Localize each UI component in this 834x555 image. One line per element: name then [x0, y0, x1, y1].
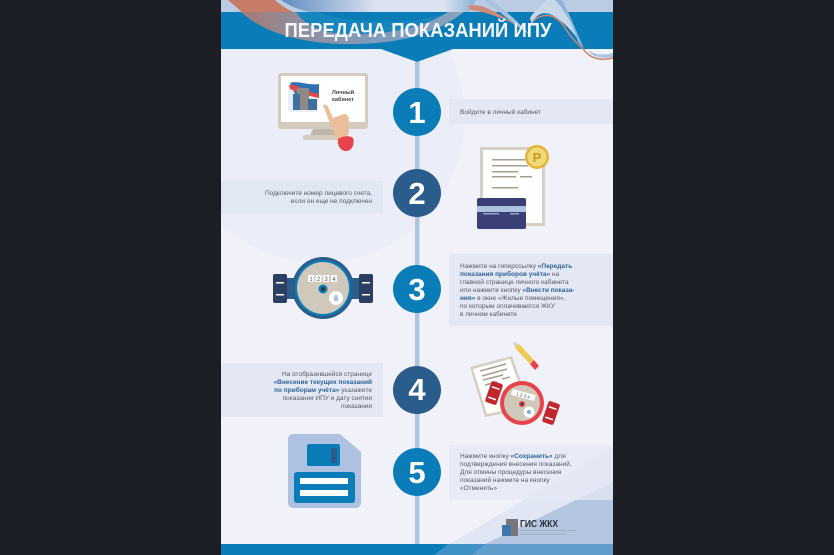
step 1 number: 1: [408, 95, 426, 130]
text panel 5: подтверждения внесения показаний.: [460, 460, 572, 468]
text panel 3: Нажмите на гиперссылку «Передать: [460, 263, 572, 270]
text panel 2: [221, 181, 383, 214]
bottom band: [221, 544, 613, 555]
icon: water meter: 3: [324, 277, 328, 283]
text panel 5: «Отменить»: [460, 485, 497, 492]
timeline line: [415, 62, 420, 545]
text panel 3: ния» в окне «Жилые помещения»,: [460, 295, 565, 302]
icon: bill and bank card with coin: Р: [533, 150, 542, 165]
ribbon left: [468, 0, 529, 34]
title: ПЕРЕДАЧА ПОКАЗАНИЙ ИПУ: [284, 18, 552, 42]
icon: water meter: 1: [309, 277, 313, 283]
step 5 number: 5: [408, 455, 426, 490]
step 1 number: [393, 88, 441, 136]
step 2 number: 2: [408, 176, 426, 211]
text panel 3: или нажмите кнопку «Внести показа-: [460, 287, 575, 294]
icon: monitor with hand: [278, 73, 368, 151]
icon: water meter: 4: [332, 277, 336, 283]
icon: bill and bank card with coin: [477, 145, 549, 229]
step 3 number: 3: [408, 272, 426, 307]
logo: ГИС ЖКХ: [502, 519, 576, 536]
logo: ГИС ЖКХ: ГИС ЖКХ: [520, 519, 558, 530]
text panel 4: «Внесение текущих показаний: [274, 378, 372, 386]
text panel 3: показания приборов учёта» на: [460, 270, 560, 278]
icon: floppy disk: [288, 434, 361, 508]
text panel 1: [449, 99, 613, 124]
step 2 number: [393, 169, 441, 217]
step 4 number: 4: [408, 372, 426, 407]
text panel 3: по которым оплачиваются ЖКУ: [460, 303, 556, 310]
text panel 3: [449, 254, 613, 326]
icon: water meter: 2: [317, 277, 321, 283]
text panel 2: Подключите номер лицевого счета,: [265, 190, 372, 197]
icon: monitor with hand: Личный: [332, 89, 355, 96]
title band: [221, 0, 613, 62]
text panel 5: [449, 445, 613, 500]
icon: monitor with hand: кабинет: [332, 96, 354, 103]
icon: red meter with paper and pencil: 1 2 3 4: [516, 391, 531, 400]
text panel 5: показаний нажмите на кнопку: [460, 476, 550, 484]
icon: red meter with paper and pencil: [470, 342, 560, 425]
text panel 1: Войдите в личный кабинет: [460, 108, 541, 116]
page background: [221, 49, 613, 544]
text panel 5: Нажмите кнопку «Сохранить» для: [460, 453, 566, 460]
ribbon right: [530, 0, 613, 59]
text panel 4: [221, 363, 383, 417]
text panel 3: главной странице личного кабинета: [460, 278, 569, 286]
text panel 3: в личном кабинете: [460, 310, 517, 318]
icon: water meter: [273, 257, 373, 319]
text panel 2: если он еще не подключен: [291, 198, 372, 205]
text panel 4: показания: [341, 403, 372, 410]
step 5 number: [393, 448, 441, 496]
text panel 4: показания ИПУ и дату снятия: [283, 395, 372, 402]
text panel 4: по приборам учёта» указажите: [274, 386, 372, 394]
text panel 5: Для отмены процедуры внесения: [460, 469, 562, 476]
step 4 number: [393, 366, 441, 414]
step 3 number: [393, 265, 441, 313]
text panel 4: На отобразившейся странице: [282, 370, 372, 378]
